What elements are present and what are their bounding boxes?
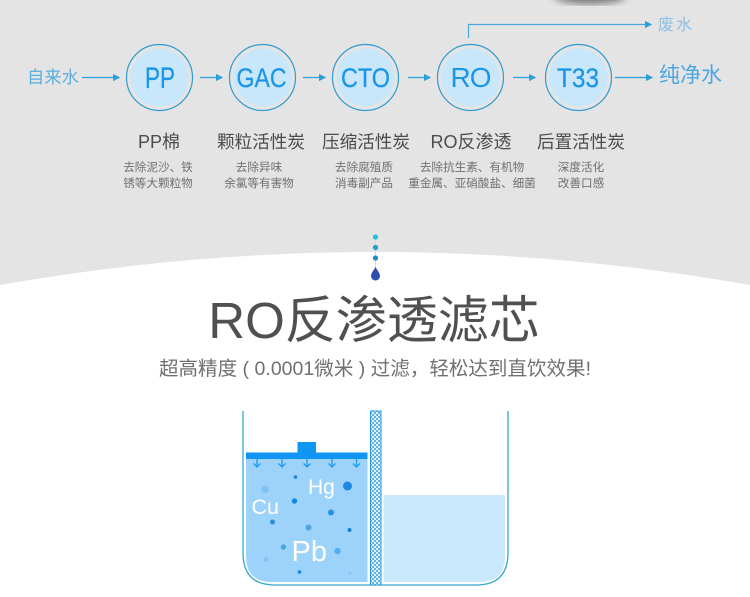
stage description: GAC: 去除异味 bbox=[236, 160, 283, 174]
stage description: T33: 后置活性炭 bbox=[537, 132, 625, 152]
filtration flow diagram bbox=[27, 16, 722, 110]
label: Hg: Hg bbox=[308, 476, 335, 499]
filtration tank diagram bbox=[243, 411, 508, 585]
stage description: GAC: 余氯等有害物 bbox=[224, 176, 294, 190]
stage circle: PP bbox=[126, 44, 192, 110]
stage circle: CTO: CTO bbox=[341, 63, 390, 93]
stage description: CTO: 消毒副产品 bbox=[335, 176, 393, 190]
label: waste water: 废水 bbox=[658, 16, 694, 34]
stage description: CTO: 压缩活性炭 bbox=[322, 132, 410, 152]
arrow: tap water to PP bbox=[82, 76, 119, 78]
icon: dotted line with water drop bbox=[371, 234, 380, 280]
stage description: T33: 改善口感 bbox=[558, 176, 605, 190]
stage circle: T33: T33 bbox=[557, 63, 599, 93]
arrow: GAC to CTO bbox=[303, 76, 325, 78]
tank outline bbox=[243, 411, 508, 585]
stage description: RO: RO反渗透 bbox=[430, 132, 512, 152]
stage description: RO: 去除抗生素、有机物 bbox=[420, 160, 525, 174]
label: pure water: 纯净水 bbox=[659, 64, 722, 87]
arrow: RO to T33 bbox=[513, 76, 535, 78]
contaminant particles bbox=[261, 475, 352, 575]
arrow: CTO to RO bbox=[408, 76, 430, 78]
RO membrane bbox=[370, 411, 381, 585]
piston plate bbox=[246, 442, 368, 459]
stage description: CTO: 去除腐殖质 bbox=[335, 160, 393, 174]
stage description: CTO bbox=[322, 132, 410, 190]
stage circle: T33 bbox=[546, 44, 612, 110]
stage description: T33 bbox=[537, 132, 625, 190]
stage circle: PP: PP bbox=[145, 62, 175, 95]
grey background with curved lower edge bbox=[0, 0, 750, 285]
stage description: GAC bbox=[217, 132, 305, 190]
arrow: RO to waste water bbox=[468, 24, 651, 38]
arrow: PP to GAC bbox=[200, 76, 222, 78]
left water chamber bbox=[246, 459, 368, 582]
stage description: PP bbox=[123, 132, 193, 190]
stage description: RO bbox=[408, 132, 536, 190]
stage description: GAC: 颗粒活性炭 bbox=[217, 132, 305, 152]
subtitle: 超高精度 ( 0.0001微米 ) 过滤，轻松达到直饮效果! bbox=[159, 358, 591, 380]
stage description: RO: 重金属、亚硝酸盐、细菌 bbox=[408, 176, 536, 190]
pressure arrows bbox=[254, 459, 360, 467]
label: tap water: 自来水 bbox=[27, 67, 79, 87]
stage description: PP: PP棉 bbox=[138, 132, 180, 152]
arrow: T33 to pure water bbox=[615, 76, 652, 78]
stage description: PP: 锈等大颗粒物 bbox=[123, 176, 193, 190]
label: Cu: Cu bbox=[252, 495, 279, 519]
stage circle: RO bbox=[438, 44, 504, 110]
shadow at top edge bbox=[554, 0, 626, 4]
label: Pb: Pb bbox=[292, 536, 327, 568]
title: RO反渗透滤芯 bbox=[208, 292, 540, 349]
stage circle: CTO bbox=[332, 44, 398, 110]
stage description: PP: 去除泥沙、铁 bbox=[123, 160, 193, 174]
stage circle: GAC bbox=[230, 44, 296, 110]
stage description: T33: 深度活化 bbox=[558, 160, 605, 174]
right water chamber bbox=[384, 495, 505, 582]
stage circle: GAC: GAC bbox=[236, 63, 286, 93]
stage circle: RO: RO bbox=[450, 62, 492, 93]
